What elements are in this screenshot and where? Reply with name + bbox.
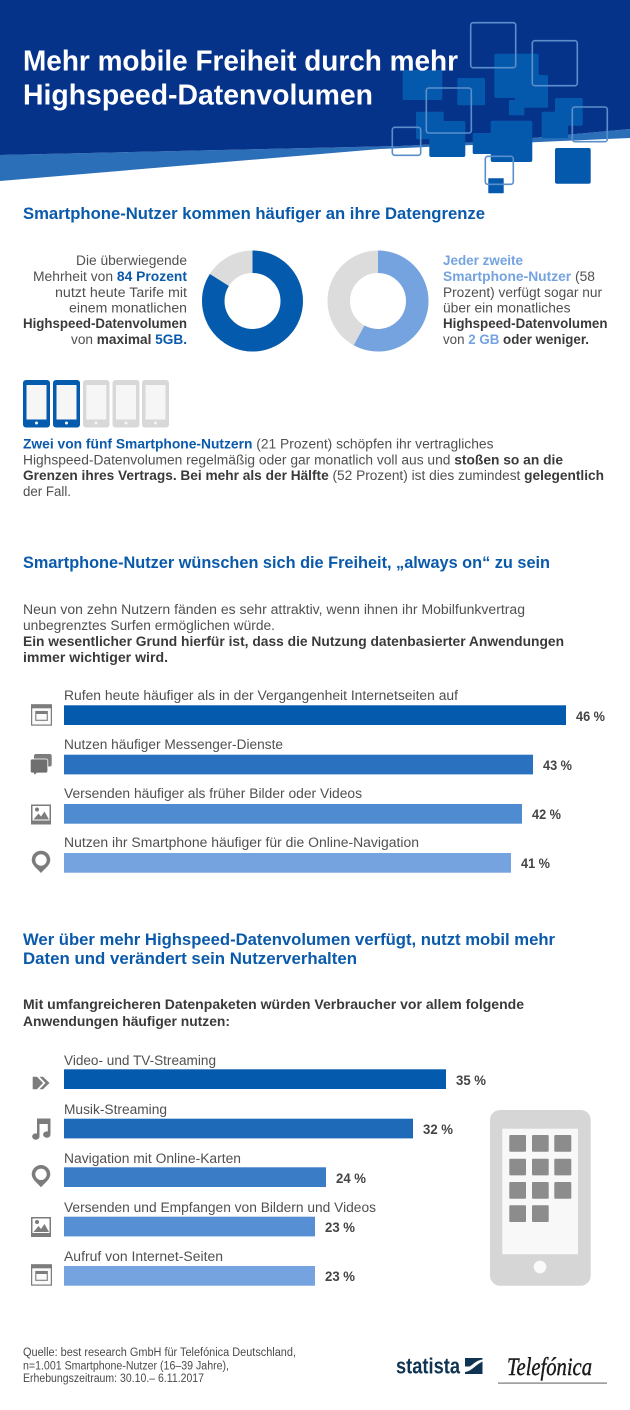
text: Vertragsgrenzen: [23, 436, 604, 499]
heading: always on: Smartphone-Nutzer wünschen sich die Freiheit, „always on“ zu sein: [23, 554, 550, 572]
logo: Telefónica: Telefónica: [507, 1354, 592, 1381]
heading: Datengrenze: Smartphone-Nutzer kommen häufiger an ihre Datengrenze: [23, 205, 485, 223]
header banner: [0, 0, 630, 193]
text: 58 Prozent: Jeder zweite: [443, 253, 523, 268]
text: 84 Prozent: Highspeed-Datenvolumen: [23, 316, 187, 331]
text: 84 Prozent: Mehrheit von 84 Prozent: [33, 269, 188, 284]
text: 58 Prozent: über ein monatliches: [443, 300, 571, 316]
bar chart: Nutzung: 46 %: [576, 709, 605, 724]
source note: [23, 1347, 296, 1385]
bar chart: Anwendungen: Video- und TV-Streaming: [64, 1053, 216, 1068]
text: 84 Prozent: von maximal 5GB.: [71, 332, 187, 347]
bar chart: Nutzung: [64, 688, 605, 873]
bar chart: Nutzung: Nutzen häufiger Messenger-Dienste: [64, 737, 283, 752]
icon: music note: [32, 1118, 51, 1140]
text: unbegrenztes Surfen: unbegrenztes Surfen ermöglichen würde.: [23, 618, 275, 633]
source note: n=1.001 Smartphone-Nutzer (16–39 Jahre),: [23, 1360, 229, 1372]
bar chart: Anwendungen: 23 %: [325, 1269, 355, 1284]
text: 84 Prozent: Die überwiegende: [76, 253, 187, 268]
bar chart: Nutzung: 42 %: [532, 807, 561, 822]
text: 58 Prozent: [443, 253, 608, 347]
text: 84 Prozent: einem monatlichen: [69, 300, 187, 316]
text: unbegrenztes Surfen: Ein wesentlicher Grund hierfür ist, dass die Nutzung datenbasierter Anwendungen: [23, 634, 564, 649]
donut chart: 84 percent: [213, 262, 292, 340]
icon: fast forward: [33, 1077, 50, 1089]
bar chart: Nutzung: Rufen heute häufiger als in der Vergangenheit Internetseiten auf: [64, 688, 458, 703]
text: 58 Prozent: Smartphone-Nutzer (58: [443, 269, 595, 284]
bar chart: Anwendungen: Navigation mit Online-Karten: [64, 1151, 241, 1166]
title: [23, 46, 458, 112]
bar chart: Anwendungen: Aufruf von Internet-Seiten: [64, 1249, 223, 1264]
bar chart: Nutzung: Nutzen ihr Smartphone häufiger für die Online-Navigation: [64, 835, 419, 850]
donut chart: 58 percent: [339, 262, 417, 340]
title: Mehr mobile Freiheit durch mehr: [23, 46, 458, 78]
text: unbegrenztes Surfen: Neun von zehn Nutzern fänden es sehr attraktiv, wenn ihnen ihr Mobilfunkvertrag: [23, 602, 525, 617]
bar chart: Anwendungen: Versenden und Empfangen von Bildern und Videos: [64, 1200, 376, 1215]
bar chart: Nutzung: 43 %: [543, 758, 572, 773]
text: 84 Prozent: nutzt heute Tarife mit: [55, 285, 187, 300]
logo: statista: statista: [396, 1354, 461, 1378]
bar chart: Anwendungen: 23 %: [325, 1220, 355, 1235]
icons: two of five phones: [23, 380, 169, 428]
text: Datenpakete: [23, 997, 525, 1029]
bar chart: Nutzung: Versenden häufiger als früher Bilder oder Videos: [64, 786, 362, 801]
source note: Erhebungszeitraum: 30.10.– 6.11.2017: [23, 1373, 204, 1385]
heading: Datenvolumen: [23, 931, 556, 968]
icon: image: [31, 1217, 51, 1237]
title: Highspeed-Datenvolumen: [23, 80, 373, 112]
text: unbegrenztes Surfen: immer wichtiger wird.: [23, 650, 168, 665]
source note: Quelle: best research GmbH für Telefónica Deutschland,: [23, 1347, 296, 1359]
heading: Datenvolumen: Wer über mehr Highspeed-Datenvolumen verfügt, nutzt mobil mehr: [23, 931, 556, 949]
text: Datenpakete: Mit umfangreicheren Datenpaketen würden Verbraucher vor allem folgende: [23, 997, 525, 1012]
text: unbegrenztes Surfen: [23, 602, 564, 665]
text: Datenpakete: Anwendungen häufiger nutzen:: [23, 1014, 230, 1029]
icon: map pin: [32, 851, 50, 873]
text: Vertragsgrenzen: Highspeed-Datenvolumen regelmäßig oder gar monatlich voll aus und stoßen so an die: [23, 452, 563, 468]
bar chart: Anwendungen: 24 %: [336, 1171, 366, 1186]
bar chart: Anwendungen: 35 %: [456, 1073, 486, 1088]
icon: map pin: [32, 1165, 50, 1187]
bar chart: Anwendungen: 32 %: [423, 1122, 453, 1137]
illustration: large phone: [490, 1110, 591, 1286]
text: Vertragsgrenzen: Grenzen ihres Vertrags. Bei mehr als der Hälfte (52 Prozent) ist dies zumindest gelegentlich: [23, 468, 604, 483]
bar chart: Nutzung: 41 %: [521, 856, 550, 871]
icon: browser: [31, 704, 52, 725]
text: 58 Prozent: Highspeed-Datenvolumen: [443, 316, 608, 331]
heading: Datenvolumen: Daten und verändert sein Nutzerverhalten: [23, 950, 357, 968]
text: 84 Prozent: [23, 253, 188, 347]
icon: browser: [31, 1264, 52, 1285]
bar chart: Anwendungen: Musik-Streaming: [64, 1102, 167, 1117]
icon: messenger: [30, 754, 52, 776]
text: 58 Prozent: von 2 GB oder weniger.: [443, 332, 589, 347]
text: 58 Prozent: Prozent) verfügt sogar nur: [443, 285, 603, 300]
bar chart: Anwendungen: [64, 1053, 486, 1286]
icon: image: [31, 804, 51, 824]
text: Vertragsgrenzen: Zwei von fünf Smartphone-Nutzern (21 Prozent) schöpfen ihr vertragliches: [23, 436, 494, 452]
text: Vertragsgrenzen: der Fall.: [23, 484, 71, 499]
